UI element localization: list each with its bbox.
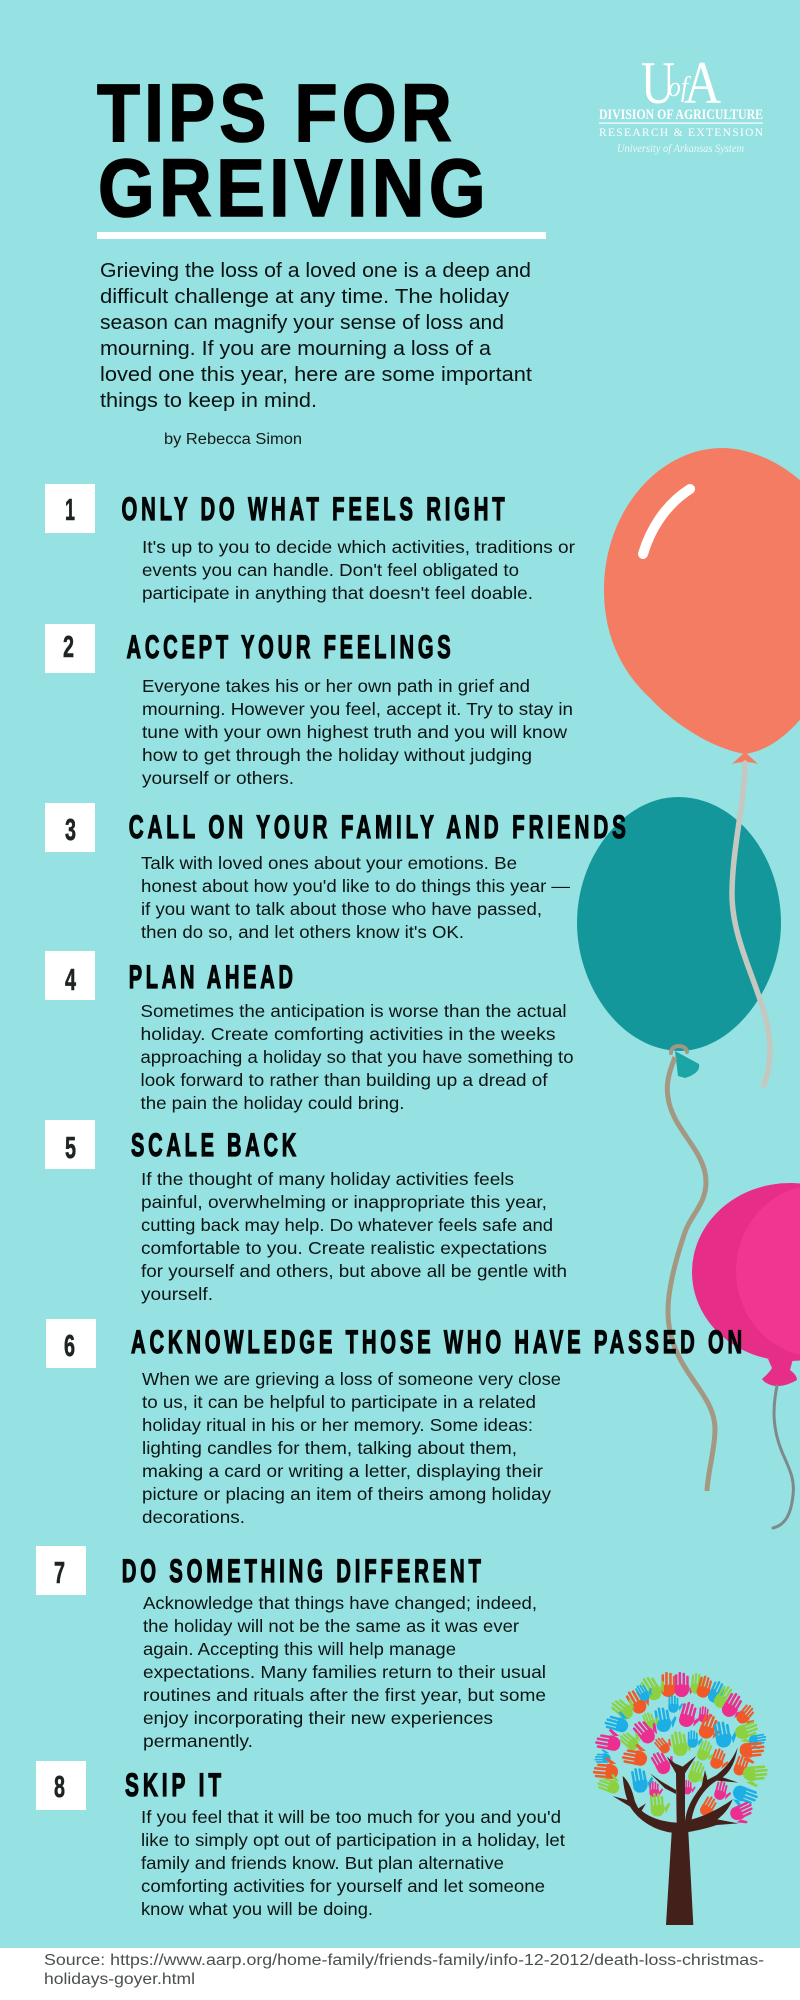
title: GREIVING [98,143,490,234]
body 6: decorations. [142,1507,245,1527]
body 2: tune with your own highest truth and you will know [142,722,567,742]
body 2 [142,676,573,788]
tip 7 [36,1546,546,1751]
logo: University of Arkansas Division of Agriculture: University of Arkansas System [617,143,744,155]
intro paragraph [100,260,532,412]
body 8: know what you will be doing. [141,1899,373,1919]
intro paragraph: Grieving the loss of a loved one is a deep and [100,260,531,282]
logo: University of Arkansas Division of Agriculture: RESEARCH & EXTENSION [599,127,764,139]
heading 7: DO SOMETHING DIFFERENT [122,1553,485,1589]
body 8: If you feel that it will be too much for you and you'd [141,1807,561,1827]
body 5: comfortable to you. Create realistic expectations [141,1238,547,1258]
body 6: picture or placing an item of theirs among holiday [142,1484,551,1504]
logo: University of Arkansas Division of Agriculture: DIVISION OF AGRICULTURE [599,107,763,123]
tip 1 [45,484,575,603]
body 3: honest about how you'd like to do things this year — [141,876,571,896]
body 8 [141,1807,565,1919]
source citation [44,1952,764,1988]
body 4: holiday. Create comforting activities in the weeks [140,1024,556,1044]
logo: University of Arkansas Division of Agriculture: A [684,50,721,116]
intro paragraph: season can magnify your sense of loss and [100,312,504,334]
tip 8 [36,1761,565,1919]
source citation: Source: https://www.aarp.org/home-family/friends-family/info-12-2012/death-loss-christmas- [44,1952,764,1969]
body 7: permanently. [143,1731,253,1751]
body 4: look forward to rather than building up a dread of [140,1070,548,1090]
body 8: like to simply opt out of participation in a holiday, let [141,1830,565,1850]
intro paragraph: difficult challenge at any time. The holiday [100,286,509,308]
body 2: how to get through the holiday without judging [142,745,532,765]
body 1: participate in anything that doesn't feel doable. [142,583,533,603]
logo: University of Arkansas Division of Agriculture: of [668,72,691,103]
body 7: again. Accepting this will help manage [143,1639,456,1659]
number badge 8: 8 [54,1769,65,1804]
number badge 2: 2 [63,629,74,664]
body 8: family and friends know. But plan alternative [141,1853,504,1873]
title [97,68,490,234]
byline: by Rebecca Simon [164,431,302,448]
intro paragraph: things to keep in mind. [100,390,317,412]
body 6: When we are grieving a loss of someone very close [142,1369,561,1389]
body 2: Everyone takes his or her own path in grief and [142,676,530,696]
number badge 4 [45,951,95,1000]
number badge 7 [36,1546,86,1595]
body 3: Talk with loved ones about your emotions. Be [141,853,517,873]
body 7 [143,1593,546,1751]
number badge 3: 3 [65,812,76,847]
number badge 6: 6 [64,1328,75,1363]
source citation: holidays-goyer.html [44,1971,195,1988]
number badge 5: 5 [65,1130,76,1165]
body 3: then do so, and let others know it's OK. [141,922,464,942]
body 5 [141,1169,567,1304]
body 7: routines and rituals after the first year, but some [143,1685,546,1705]
number badge 4: 4 [65,962,76,997]
body 5: cutting back may help. Do whatever feels safe and [141,1215,553,1235]
body 8: comforting activities for yourself and let someone [141,1876,545,1896]
body 7: Acknowledge that things have changed; indeed, [143,1593,537,1613]
number badge 8 [36,1761,86,1810]
body 6: to us, it can be helpful to participate in a related [142,1392,536,1412]
footer band [0,1948,800,2000]
body 6: lighting candles for them, talking about them, [142,1438,517,1458]
tip 3 [45,803,630,942]
body 3: if you want to talk about those who have passed, [141,899,542,919]
body 7: expectations. Many families return to their usual [143,1662,546,1682]
number badge 6 [46,1319,96,1368]
body 1: It's up to you to decide which activities, traditions or [142,537,575,557]
tip 4 [45,951,574,1113]
balloon: orange [604,448,800,764]
body 1 [142,537,575,603]
number badge 2 [45,624,95,673]
body 6: making a card or writing a letter, displaying their [142,1461,543,1481]
logo: University of Arkansas Division of Agriculture: U [641,50,675,116]
body 6: holiday ritual in his or her memory. Some ideas: [142,1415,533,1435]
body 2: yourself or others. [142,768,294,788]
number badge 1 [45,484,95,533]
heading 8: SKIP IT [125,1767,225,1803]
body 5: for yourself and others, but above all be gentle with [141,1261,567,1281]
body 7: the holiday will not be the same as it was ever [143,1616,519,1636]
heading 1: ONLY DO WHAT FEELS RIGHT [122,491,508,527]
number badge 1: 1 [65,492,75,527]
body 6 [142,1369,561,1527]
number badge 3 [45,803,95,852]
body 5: If the thought of many holiday activities feels [141,1169,514,1189]
body 4: approaching a holiday so that you have something to [140,1047,574,1067]
tip 2 [45,624,573,788]
body 5: yourself. [141,1284,213,1304]
heading 5: SCALE BACK [131,1127,300,1163]
number badge 7: 7 [54,1555,65,1590]
tip 6 [46,1319,746,1527]
logo: University of Arkansas Division of Agriculture [599,50,764,155]
heading 4: PLAN AHEAD [129,959,297,995]
title: TIPS FOR [97,68,456,159]
body 4: Sometimes the anticipation is worse than the actual [140,1001,566,1021]
balloon: teal [577,797,781,1491]
title underline [97,232,546,239]
body 2: mourning. However you feel, accept it. Try to stay in [142,699,573,719]
body 4: the pain the holiday could bring. [140,1093,404,1113]
intro paragraph: loved one this year, here are some important [100,364,532,386]
number badge 5 [45,1120,95,1169]
body 7: enjoy incorporating their new experiences [143,1708,493,1728]
tip 5 [45,1120,567,1304]
body 1: events you can handle. Don't feel obligated to [142,560,519,580]
body 4 [140,1001,574,1113]
intro paragraph: mourning. If you are mourning a loss of a [100,338,492,360]
balloon: pink [692,1183,800,1528]
illustration: tree of colourful hands [592,1670,769,1925]
balloon string: orange balloon [732,763,770,1085]
body 3 [141,853,571,942]
body 5: painful, overwhelming or inappropriate this year, [141,1192,547,1212]
heading 2: ACCEPT YOUR FEELINGS [126,629,454,665]
